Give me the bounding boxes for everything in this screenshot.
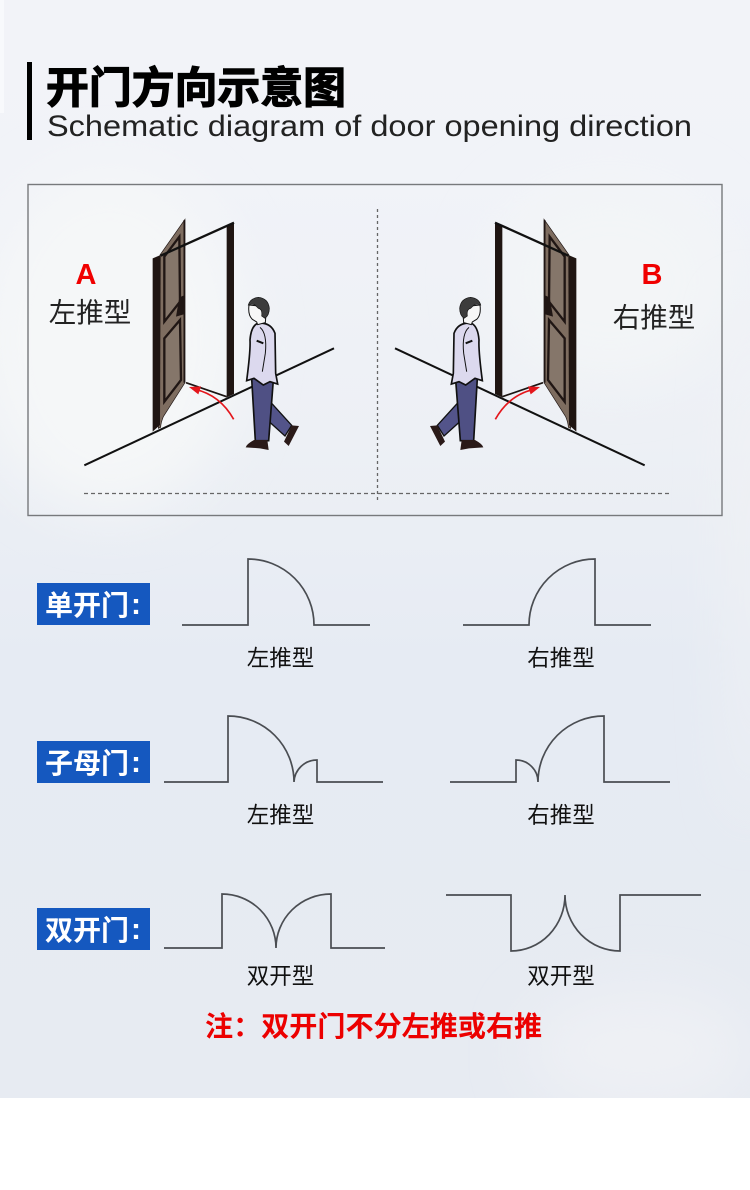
plan: single door left push [182, 559, 370, 625]
plan: single door right push [463, 559, 651, 625]
caption: 右推型 [527, 646, 595, 671]
illustration: right push door and person [395, 219, 645, 465]
plan: double door inward [446, 895, 701, 951]
tag: mother-and-child door: 子母门 [45, 748, 129, 779]
title: 开门方向示意图 [46, 65, 346, 113]
caption: 左推型 [247, 803, 314, 828]
label: right push: 右推型 [613, 302, 695, 333]
label: B: B [642, 259, 662, 291]
label: left push: 左推型 [49, 297, 131, 328]
tag: double door: 双开门 [45, 915, 129, 946]
section: mother-and-child door [37, 716, 670, 828]
tag: double door: : [131, 913, 141, 946]
panel: door opening illustration [28, 184, 722, 516]
plan: mother-and-child right push [450, 716, 670, 782]
tag: mother-and-child door [37, 741, 150, 783]
panel frame [28, 184, 722, 516]
tag: single door: : [131, 588, 141, 621]
caption: 双开型 [527, 964, 595, 989]
subtitle: Schematic diagram of door opening direction [47, 110, 692, 143]
plan: double door outward [164, 894, 385, 948]
title block [27, 62, 692, 143]
tag: single door: 单开门 [45, 590, 129, 621]
caption: 右推型 [527, 803, 595, 828]
section: single door [37, 559, 651, 671]
illustration: left push door and person [84, 219, 334, 465]
title accent bar [27, 62, 32, 140]
section: double door [37, 894, 701, 989]
note: 注：双开门不分左推或右推 [205, 1010, 542, 1042]
plan: mother-and-child left push [164, 716, 383, 782]
tag: double door [37, 908, 150, 950]
label: A: A [76, 259, 97, 291]
caption: 双开型 [247, 964, 314, 989]
caption: 左推型 [247, 646, 314, 671]
tag: single door [37, 583, 150, 625]
tag: mother-and-child door: : [131, 746, 141, 779]
